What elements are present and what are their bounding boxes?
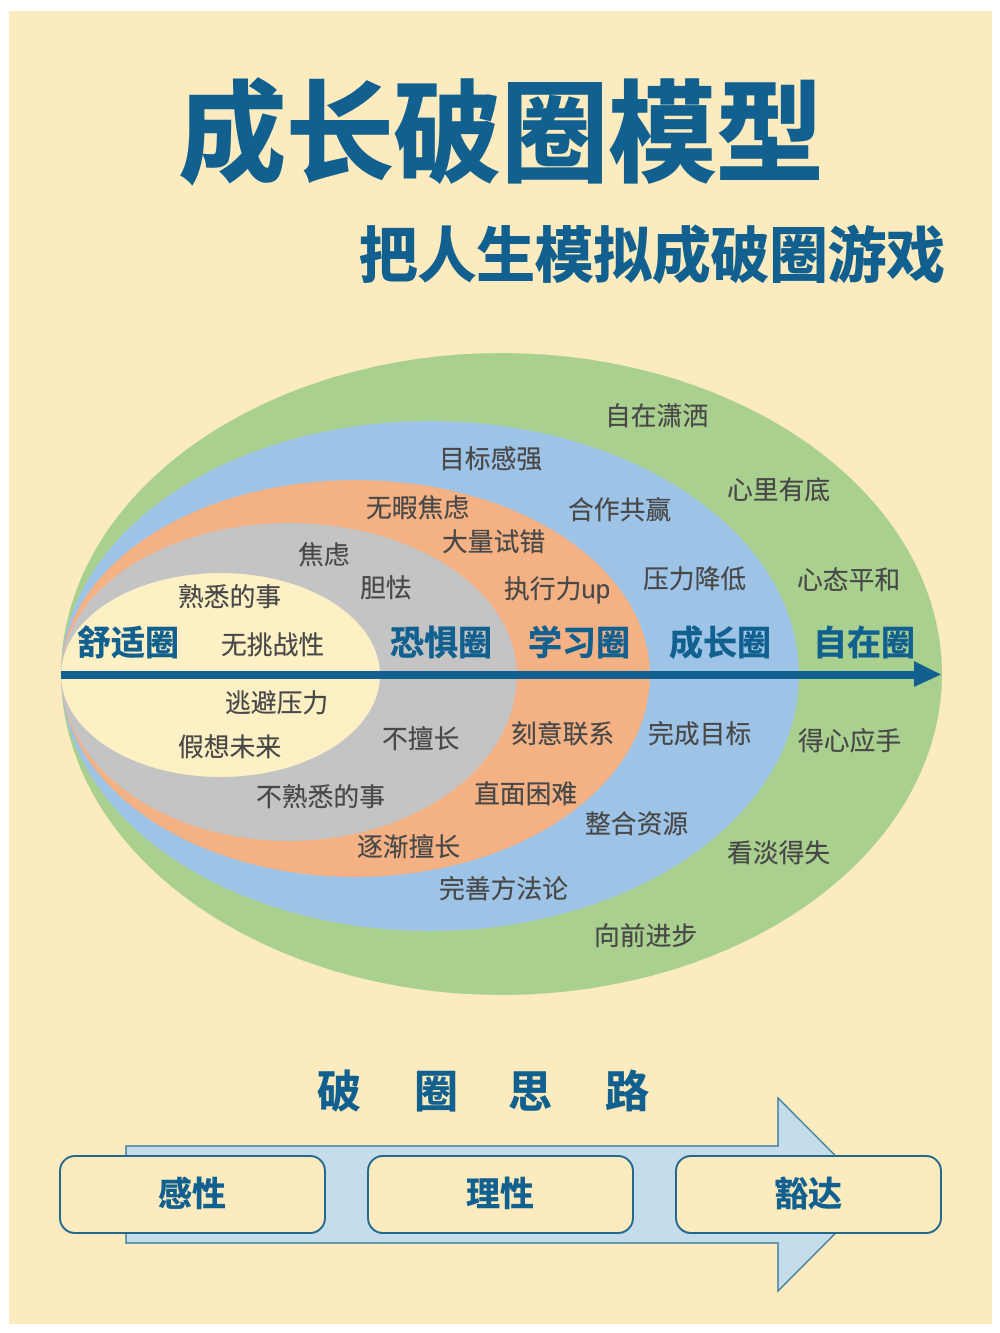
heading: breakout approach: 圈 bbox=[414, 1068, 458, 1117]
learning zone text: 无暇焦虑 bbox=[366, 494, 469, 523]
large arrow bbox=[126, 1098, 874, 1291]
free zone text: 向前进步 bbox=[594, 922, 697, 951]
growth zone text: 完善方法论 bbox=[439, 875, 568, 904]
learning zone text: 执行力up bbox=[504, 575, 610, 604]
box: emotion bbox=[60, 1156, 325, 1233]
comfort zone text: 熟悉的事 bbox=[178, 583, 281, 612]
growth zone text: 目标感强 bbox=[439, 445, 542, 474]
zone labels: 舒适圈 bbox=[77, 625, 179, 663]
zone labels: 恐惧圈 bbox=[390, 625, 492, 663]
subtitle: 把人生模拟成破圈游戏 bbox=[359, 223, 945, 290]
free zone text: 自在潇洒 bbox=[605, 402, 708, 431]
heading: breakout approach bbox=[317, 1068, 649, 1117]
free zone text: 心里有底 bbox=[727, 476, 830, 505]
zone labels: 自在圈 bbox=[813, 625, 915, 663]
free zone text: 看淡得失 bbox=[727, 839, 830, 868]
axis arrow bbox=[61, 661, 941, 687]
fear zone text bbox=[256, 541, 459, 812]
growth zone text: 合作共赢 bbox=[568, 496, 671, 525]
box: reason bbox=[368, 1156, 633, 1233]
growth zone text: 完成目标 bbox=[648, 720, 751, 749]
comfort zone text bbox=[178, 583, 328, 762]
zone labels: 成长圈 bbox=[669, 625, 771, 663]
learning zone text: 刻意联系 bbox=[511, 720, 614, 749]
free zone text: 得心应手 bbox=[798, 727, 901, 756]
box: reason: 理性 bbox=[466, 1176, 534, 1214]
fear zone text: 胆怯 bbox=[360, 574, 412, 603]
growth zone text bbox=[439, 445, 751, 904]
free zone text bbox=[594, 402, 901, 951]
comfort zone text: 假想未来 bbox=[178, 733, 281, 762]
title: 成长破圈模型 bbox=[178, 74, 824, 197]
box: emotion: 感性 bbox=[158, 1176, 226, 1214]
fear zone text: 不擅长 bbox=[382, 725, 459, 754]
heading: breakout approach: 思 bbox=[508, 1068, 552, 1117]
zone labels: 学习圈 bbox=[528, 625, 630, 663]
fear zone text: 不熟悉的事 bbox=[256, 783, 385, 812]
learning zone text: 逐渐擅长 bbox=[357, 833, 460, 862]
heading: breakout approach: 路 bbox=[605, 1068, 649, 1117]
circle: fear zone gray bbox=[61, 523, 517, 841]
growth zone text: 压力降低 bbox=[643, 565, 746, 594]
learning zone text: 大量试错 bbox=[442, 528, 545, 557]
zone labels bbox=[77, 625, 915, 663]
fear zone text: 焦虑 bbox=[298, 541, 350, 570]
box: open-minded bbox=[676, 1156, 941, 1233]
circle: learning zone orange bbox=[61, 480, 650, 877]
comfort zone text: 无挑战性 bbox=[221, 631, 324, 660]
circle: free zone green bbox=[61, 353, 942, 995]
learning zone text bbox=[357, 494, 614, 862]
concentric circles diagram bbox=[61, 353, 942, 995]
free zone text: 心态平和 bbox=[797, 566, 900, 595]
circle: comfort zone cream bbox=[61, 573, 380, 777]
heading: breakout approach: 破 bbox=[317, 1068, 361, 1117]
circle: growth zone blue bbox=[61, 421, 799, 931]
growth zone text: 整合资源 bbox=[585, 810, 688, 839]
comfort zone text: 逃避压力 bbox=[225, 689, 328, 718]
box: open-minded: 豁达 bbox=[774, 1176, 842, 1214]
learning zone text: 直面困难 bbox=[474, 780, 577, 809]
